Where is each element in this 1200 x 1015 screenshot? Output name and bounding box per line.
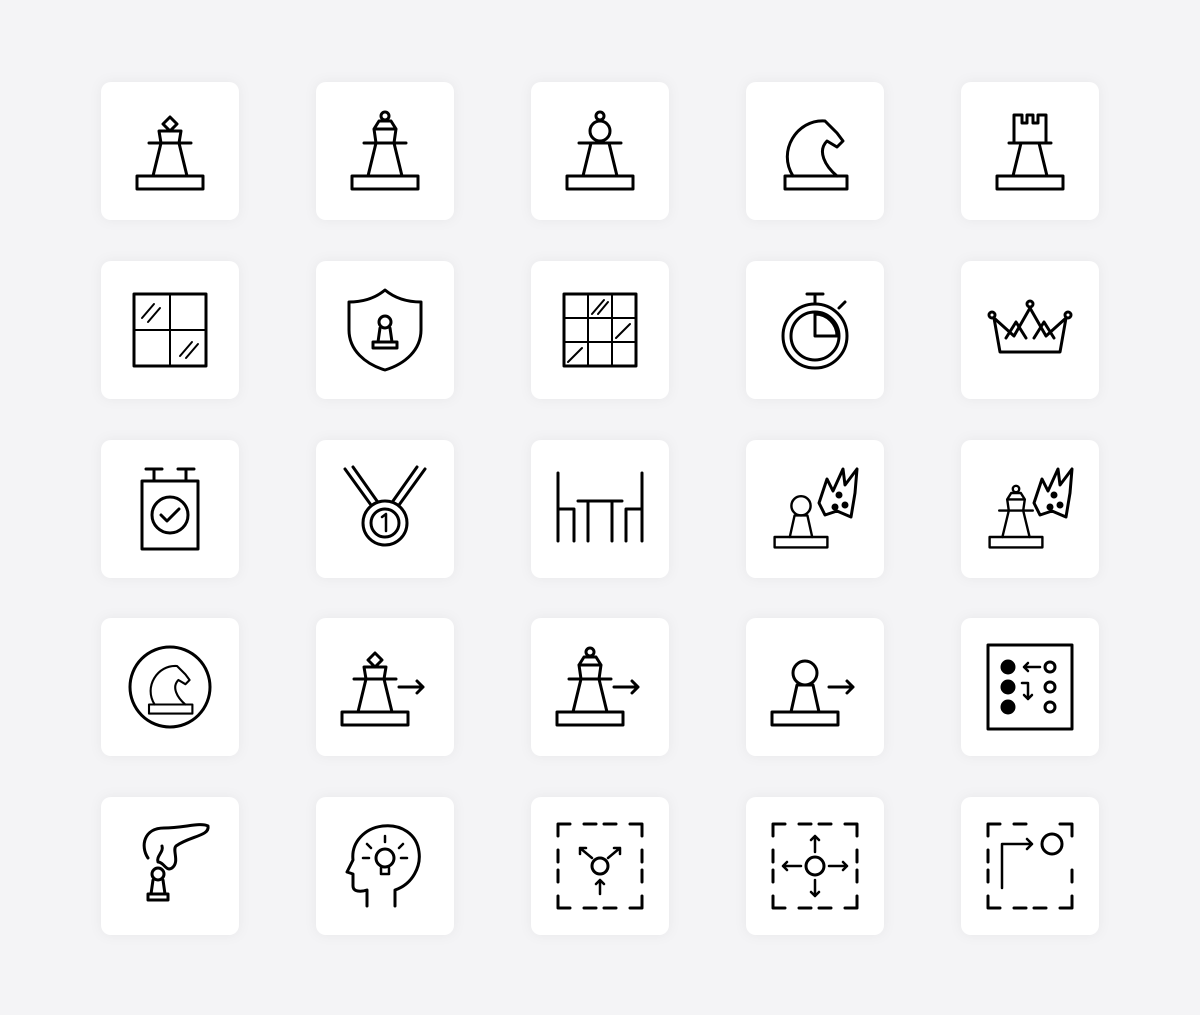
tile: dashed frame corner arrow [961, 797, 1099, 935]
tile: pawn capture [746, 440, 884, 578]
icon: crown [989, 301, 1071, 352]
icon: head with idea [347, 826, 419, 906]
arrow [399, 681, 423, 693]
icon: pawn capture [775, 496, 827, 547]
icon: dashed frame cross arrows [773, 824, 857, 908]
tile: queen move [531, 618, 669, 756]
tile: king [101, 82, 239, 220]
tile: rook [961, 82, 1099, 220]
tile: knight [746, 82, 884, 220]
tile: hand pawn [101, 797, 239, 935]
icon: king move [342, 653, 408, 725]
icon: queen move [557, 648, 623, 725]
tile: knight circle [101, 618, 239, 756]
tile: queen capture [961, 440, 1099, 578]
tile: 2x2 board [101, 261, 239, 399]
icon: strategy board [988, 645, 1072, 729]
tile: 3x3 board [531, 261, 669, 399]
icon: chess clock [142, 469, 198, 549]
tile: table [531, 440, 669, 578]
icon: dashed frame corner arrow [988, 824, 1072, 908]
icon: hand holding pawn [144, 825, 208, 900]
icon: rook [997, 115, 1063, 189]
tile: king move [316, 618, 454, 756]
icon: medal [345, 467, 425, 545]
tile: dashed frame cross arrows [746, 797, 884, 935]
tile: strategy board [961, 618, 1099, 756]
icon: table and chairs [558, 473, 642, 541]
tile: stopwatch [746, 261, 884, 399]
icon: board 3x3 [564, 294, 636, 366]
arrow [829, 681, 853, 693]
icon: king [137, 117, 203, 189]
tile: head bulb [316, 797, 454, 935]
tile: crown [961, 261, 1099, 399]
icon: board 2x2 [134, 294, 206, 366]
icon: knight in circle [130, 647, 210, 727]
tile: bishop [531, 82, 669, 220]
icon: bishop [567, 112, 633, 189]
icon: pawn move [772, 661, 838, 725]
arrow [614, 681, 638, 693]
tile: shield pawn [316, 261, 454, 399]
tile: pawn move [746, 618, 884, 756]
icon: queen capture [990, 486, 1042, 547]
icon: shield [349, 290, 421, 370]
tile: medal [316, 440, 454, 578]
tile: chess clock [101, 440, 239, 578]
icon: queen [352, 112, 418, 189]
icon: knight [785, 121, 847, 189]
tile: queen [316, 82, 454, 220]
icon: stopwatch [783, 294, 847, 368]
tile: dashed frame arrows up [531, 797, 669, 935]
icon: dashed frame diverging arrows [558, 824, 642, 908]
